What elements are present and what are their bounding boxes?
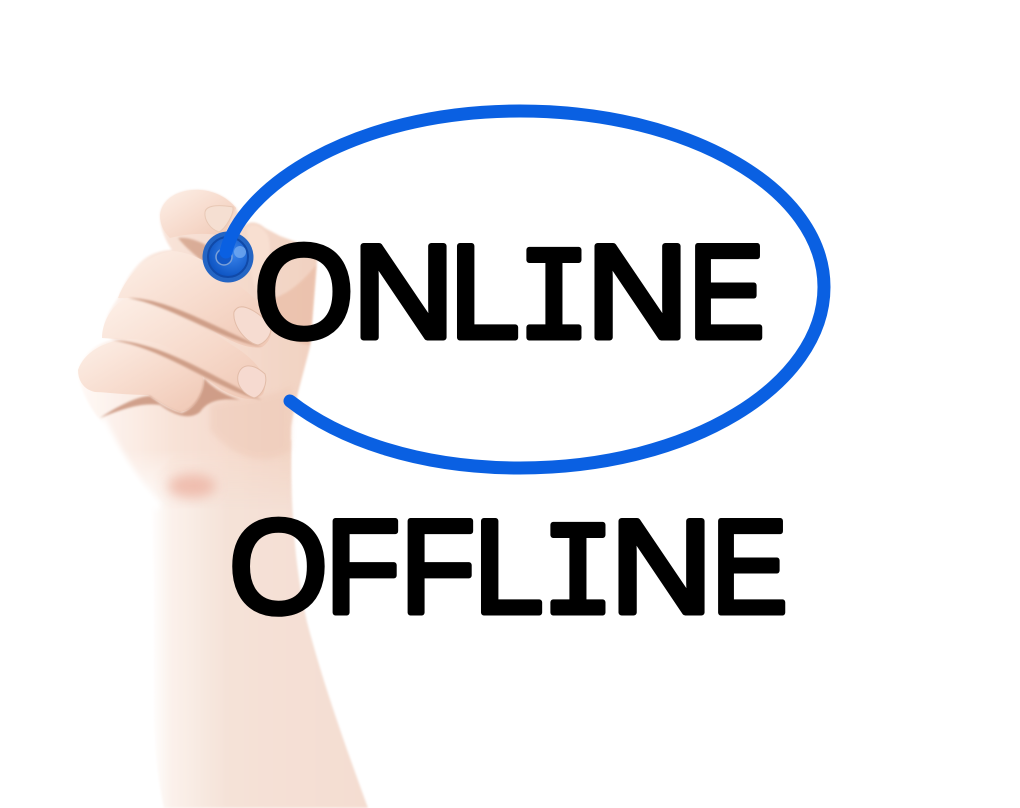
shadow under top finger [178, 238, 222, 266]
word: ONLINE: O [254, 218, 354, 366]
finger creases [128, 298, 262, 347]
knuckle pink spot [168, 474, 216, 498]
word: ONLINE: N [352, 218, 455, 366]
third finger [102, 298, 265, 399]
word: OFFLINE: N [610, 494, 713, 642]
fourth finger [78, 339, 203, 412]
illustration: hand circling ONLINE with a blue marker [78, 104, 830, 808]
palm shading [210, 385, 292, 459]
word: ONLINE: E [688, 218, 765, 366]
thumb shading behind O [268, 265, 316, 345]
marker ellipse stroke [226, 111, 824, 468]
word: OFFLINE: F [400, 494, 475, 642]
word: OFFLINE: L [474, 494, 544, 642]
arm [150, 440, 368, 808]
top fingernail [205, 206, 233, 232]
word: ONLINE: N [586, 218, 689, 366]
marker cap [202, 232, 254, 282]
word: ONLINE: L [450, 218, 520, 366]
second fingernail [234, 307, 271, 345]
hand silhouette [78, 190, 318, 515]
word: ONLINE: I [517, 226, 591, 378]
left edge fade [100, 420, 158, 508]
top fingertip [160, 190, 236, 238]
word: OFFLINE: F [325, 494, 400, 642]
third fingernail [238, 366, 266, 398]
word: OFFLINE: I [541, 502, 615, 652]
word: OFFLINE: E [711, 494, 788, 642]
word: OFFLINE: O [229, 494, 328, 642]
second finger [118, 251, 272, 347]
hand [78, 190, 318, 515]
